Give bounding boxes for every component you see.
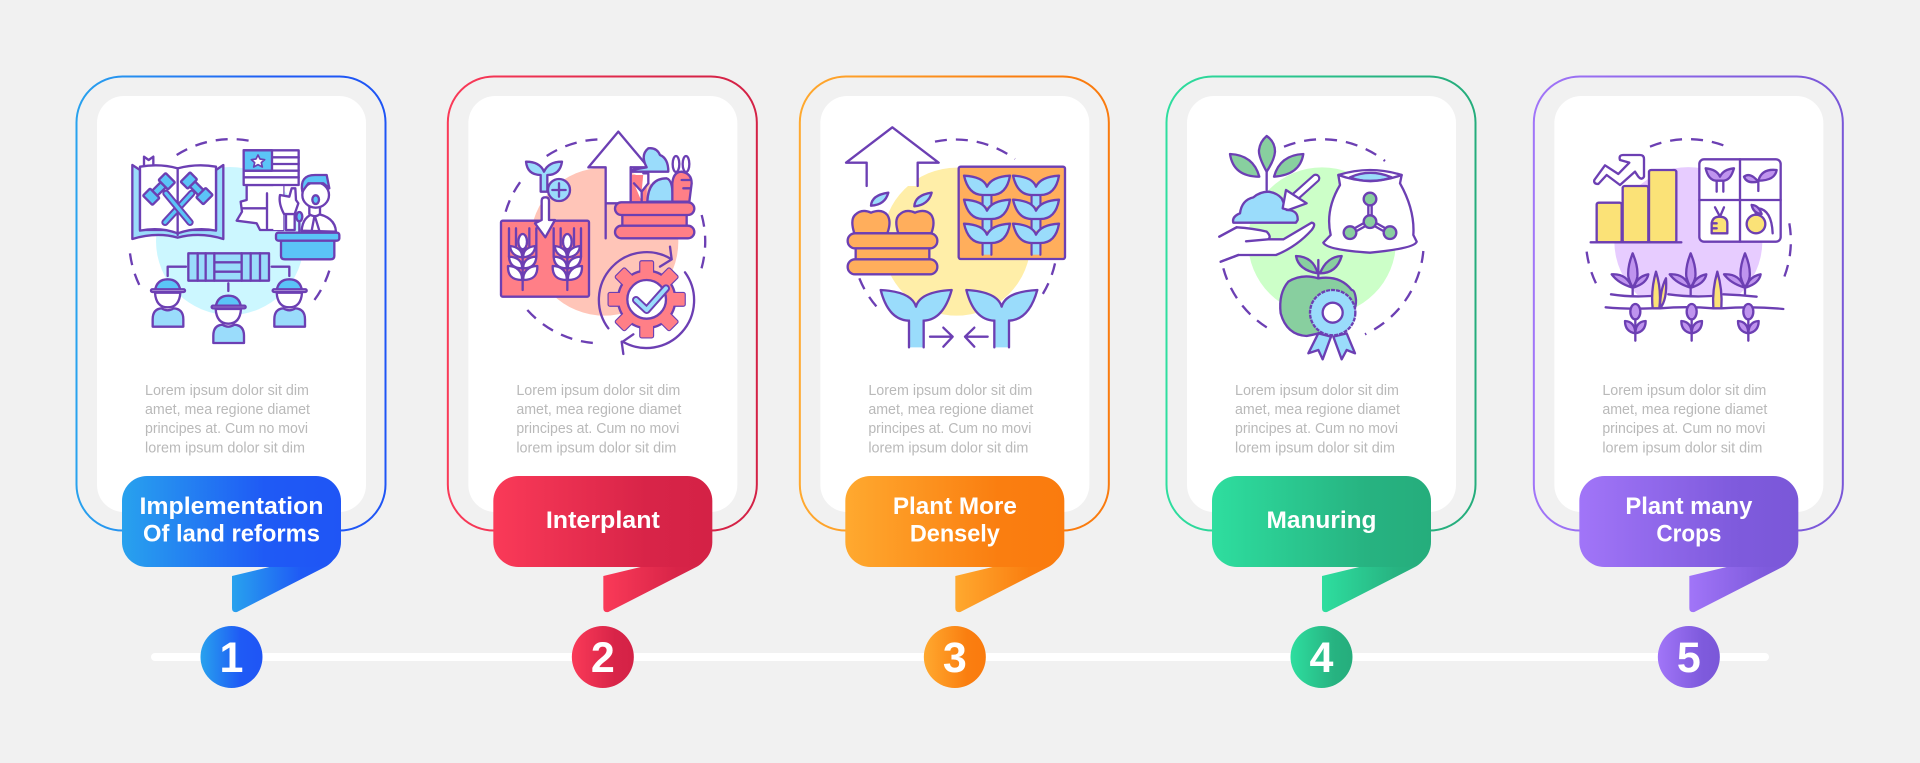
label title: Densely (910, 520, 1000, 548)
body text: Lorem ipsum dolor sit dim (516, 382, 680, 399)
panel: step 5 plant many crops (1534, 76, 1843, 688)
body text: principes at. Cum no movi (516, 420, 679, 437)
panel: step 4 manuring (1166, 76, 1476, 688)
body text: amet, mea regione diamet (1602, 401, 1768, 418)
body text: amet, mea regione diamet (145, 401, 311, 418)
label tail (603, 552, 709, 612)
label title: Interplant (546, 507, 660, 534)
number badge (200, 626, 262, 688)
card inner panel (97, 96, 366, 512)
body text: lorem ipsum dolor sit dim (145, 440, 305, 456)
body text: amet, mea regione diamet (516, 401, 682, 418)
body text: principes at. Cum no movi (1235, 420, 1398, 437)
number badge (1290, 626, 1352, 688)
body text: principes at. Cum no movi (868, 420, 1031, 437)
panel: step 3 plant more densely (800, 76, 1109, 688)
number badge: 1 (220, 634, 243, 682)
body text: lorem ipsum dolor sit dim (868, 440, 1028, 456)
card inner panel (1187, 96, 1456, 512)
body text: lorem ipsum dolor sit dim (1235, 440, 1395, 456)
body text: lorem ipsum dolor sit dim (1602, 440, 1762, 456)
label title: Crops (1656, 520, 1721, 548)
label box (845, 476, 1064, 567)
body text: Lorem ipsum dolor sit dim (145, 382, 309, 399)
number badge: 3 (943, 634, 967, 682)
number badge: 5 (1677, 634, 1701, 682)
card outline (76, 76, 386, 530)
icon: dense planting field and seedlings (846, 127, 1065, 347)
card outline (1166, 76, 1476, 530)
body text: Lorem ipsum dolor sit dim (1602, 382, 1766, 399)
panel: step 1 implementation of land reforms (76, 76, 386, 688)
label title: Of land reforms (143, 520, 320, 548)
card outline (800, 76, 1109, 530)
label tail (232, 552, 338, 612)
number badge: 2 (591, 634, 615, 682)
card inner panel (820, 96, 1089, 512)
body text: principes at. Cum no movi (145, 420, 308, 437)
number badge: 4 (1310, 634, 1334, 682)
label tail (1322, 552, 1428, 612)
number badge (924, 626, 986, 688)
label box (1212, 476, 1431, 567)
number badge (1658, 626, 1720, 688)
card inner panel (1554, 96, 1823, 512)
label box (122, 476, 341, 567)
icon: interplanting field, harvest and gear (501, 132, 705, 354)
label title: Manuring (1266, 507, 1376, 534)
label title: Plant many (1625, 493, 1753, 520)
label tail (955, 552, 1061, 612)
card inner panel (468, 96, 737, 512)
label box (1579, 476, 1798, 567)
label title: Plant More (893, 493, 1017, 520)
card outline (448, 76, 757, 530)
body text: amet, mea regione diamet (1235, 401, 1401, 418)
timeline line (151, 653, 1769, 661)
label tail (1689, 552, 1795, 612)
icon: land reform book, flag, speaker and farmers (130, 139, 339, 343)
number badge (572, 626, 634, 688)
body text: amet, mea regione diamet (868, 401, 1034, 418)
icon: manure sack, plant in hand and apple with rosette (1219, 136, 1423, 359)
body text: Lorem ipsum dolor sit dim (1235, 382, 1399, 399)
label title: Implementation (140, 493, 324, 520)
body text: Lorem ipsum dolor sit dim (868, 382, 1032, 399)
card outline (1534, 76, 1843, 530)
body text: lorem ipsum dolor sit dim (516, 440, 676, 456)
panel: step 2 interplant (448, 76, 757, 688)
label box (493, 476, 712, 567)
icon: bar chart, crop grid and rows of plants (1587, 139, 1791, 341)
body text: principes at. Cum no movi (1602, 420, 1765, 437)
